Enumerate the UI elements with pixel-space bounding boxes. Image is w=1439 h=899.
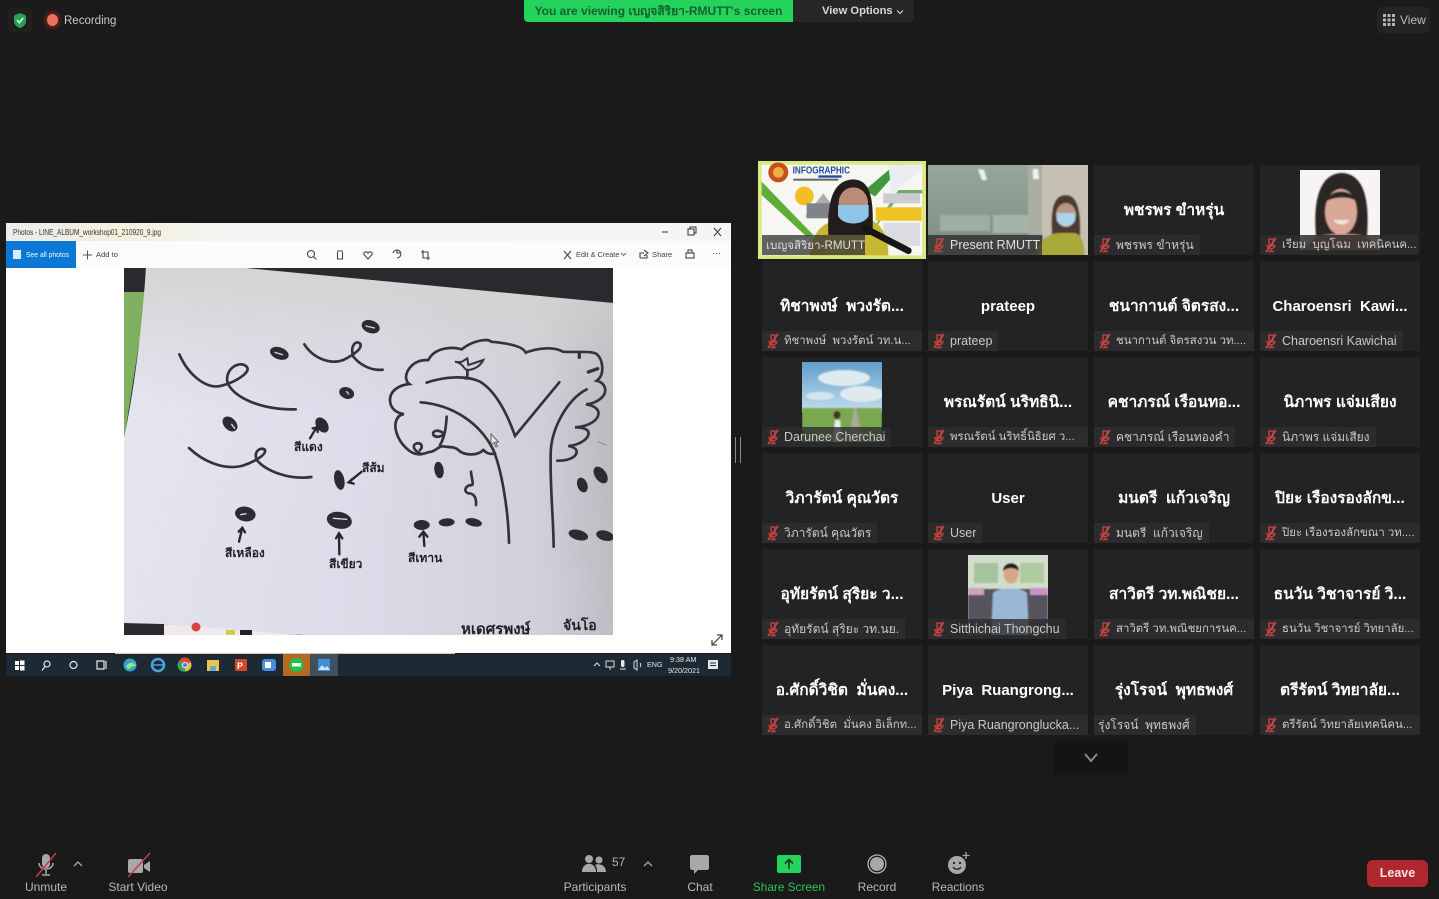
control: start video bbox=[108, 852, 168, 894]
name label bbox=[1260, 331, 1403, 351]
panel: active speaker tile เบญจสิริยา-RMUTT bbox=[758, 161, 926, 259]
icon: muted mic bbox=[767, 622, 779, 636]
tile Darunee Cherchai bbox=[762, 357, 922, 447]
tile รุ่งโรจน์ พุทธพงศ์ bbox=[1094, 645, 1254, 735]
control: start video: Start Video bbox=[108, 880, 168, 894]
title bar: Photos - LINE_ALBUM_workshop01_210920_9.jpg bbox=[13, 228, 161, 237]
recording indicator: Recording bbox=[64, 15, 116, 27]
name label: สาวิตรี วท.พณิชยการนค... bbox=[1116, 623, 1246, 635]
display name: อุทัยรัตน์ สุริยะ ว... bbox=[780, 586, 904, 603]
photo: hand drawing on paper: สีเหลือง bbox=[225, 546, 265, 560]
toolbar: Add to bbox=[96, 250, 118, 259]
title bar bbox=[6, 223, 731, 241]
avatar photo bbox=[802, 362, 882, 442]
name label bbox=[762, 331, 922, 351]
display name: สาวิตรี วท.พณิชย... bbox=[1109, 586, 1239, 603]
icon: muted mic bbox=[933, 622, 945, 636]
tile มนตรี แก้วเจริญ bbox=[1094, 453, 1254, 543]
panel: shared photo window bbox=[6, 223, 731, 676]
tile นิภาพร แจ่มเสียง bbox=[1260, 357, 1420, 447]
icon: muted mic bbox=[933, 718, 945, 732]
display name: ตรีรัตน์ วิทยาลัย... bbox=[1280, 682, 1400, 699]
name label: prateep bbox=[950, 334, 992, 348]
photo: hand drawing on paper: สีเทาน bbox=[408, 551, 443, 565]
name label: วิภารัตน์ คุณวัตร bbox=[784, 526, 871, 540]
name label: Present RMUTT bbox=[950, 238, 1040, 252]
name label bbox=[762, 235, 865, 255]
name label bbox=[928, 235, 1042, 255]
control: record bbox=[858, 854, 896, 894]
display name: มนตรี แก้วเจริญ bbox=[1118, 490, 1230, 507]
name label: เรียม บุญโฉม เทคนิคนค... bbox=[1282, 239, 1417, 251]
caret: participant options bbox=[644, 861, 652, 866]
control: reactions: Reactions bbox=[932, 880, 984, 894]
tile Sitthichai Thongchu bbox=[928, 549, 1088, 639]
name label: พชรพร ขำหรุ่น bbox=[1116, 238, 1194, 252]
display name: ทิชาพงษ์ พวงรัต... bbox=[780, 298, 904, 315]
toolbar: Edit & Create bbox=[576, 250, 619, 259]
photo: hand drawing on paper: จันโอ bbox=[563, 616, 597, 633]
toolbar: ··· bbox=[712, 248, 721, 258]
name label: ธนวัน วิชาจารย์ วิทยาลัย... bbox=[1282, 623, 1414, 635]
name label bbox=[1260, 235, 1418, 255]
icon: security shield bbox=[8, 8, 32, 32]
button: view options: View Options bbox=[822, 5, 893, 17]
name label: รุ่งโรจน์ พุทธพงศ์ bbox=[1098, 718, 1190, 732]
window strip under photo bbox=[115, 653, 455, 654]
display name: User bbox=[991, 490, 1025, 507]
name label bbox=[928, 619, 1066, 639]
name label bbox=[762, 619, 905, 639]
tile ชนากานต์ จิตรสงวน bbox=[1094, 261, 1254, 351]
icon: muted mic bbox=[1265, 334, 1277, 348]
name label bbox=[1094, 331, 1254, 351]
control: participants: Participants bbox=[564, 880, 626, 894]
icon: muted mic bbox=[767, 718, 779, 732]
tile คชาภรณ์ เรือนทองคำ bbox=[1094, 357, 1254, 447]
tile สาวิตรี วท.พณิชย bbox=[1094, 549, 1254, 639]
control: reactions bbox=[932, 852, 984, 894]
tile พรณรัตน์ นริทธินิ bbox=[928, 357, 1088, 447]
name label: User bbox=[950, 526, 976, 540]
name label: ปิยะ เรืองรองลักขณา วท.... bbox=[1282, 527, 1414, 539]
tile เรียม บุญโฉม bbox=[1260, 165, 1420, 255]
name label bbox=[928, 427, 1088, 447]
taskbar: ENG bbox=[647, 660, 663, 669]
tile User bbox=[928, 453, 1088, 543]
taskbar bbox=[6, 654, 731, 676]
name label: Sitthichai Thongchu bbox=[950, 622, 1060, 636]
icon: muted mic bbox=[1099, 334, 1111, 348]
name label bbox=[762, 715, 922, 735]
toolbar: See all photos bbox=[26, 250, 69, 259]
icon: muted mic bbox=[933, 430, 945, 444]
button: view layout: View bbox=[1400, 13, 1426, 27]
icon: muted mic bbox=[1099, 238, 1111, 252]
display name: คชาภรณ์ เรือนทอ... bbox=[1108, 394, 1240, 411]
button: next page chevron bbox=[1054, 741, 1128, 775]
name label: มนตรี แก้วเจริญ bbox=[1116, 526, 1203, 540]
panel: tile Present RMUTT bbox=[928, 165, 1088, 255]
tile พชรพร ขำหรุ่น bbox=[1094, 165, 1254, 255]
name label: พรณรัตน์ นริทธิ์นิธิยศ ว... bbox=[950, 431, 1075, 443]
icon: expand bbox=[712, 635, 722, 645]
taskbar: 9/20/2021 bbox=[668, 666, 700, 675]
name label bbox=[1094, 619, 1254, 639]
display name: รุ่งโรจน์ พุทธพงศ์ bbox=[1115, 682, 1233, 699]
tile prateep bbox=[928, 261, 1088, 351]
button: view layout bbox=[1377, 7, 1430, 33]
name label bbox=[1094, 427, 1235, 447]
splitter handle bbox=[735, 437, 741, 463]
display name: อ.ศักดิ์วิชิต มั่นคง... bbox=[776, 682, 908, 699]
mouse cursor bbox=[491, 434, 498, 447]
display name: นิภาพร แจ่มเสียง bbox=[1283, 394, 1397, 411]
name label: Darunee Cherchai bbox=[784, 430, 885, 444]
toolbar bbox=[6, 241, 731, 268]
white photo background bbox=[6, 268, 731, 653]
taskbar: 9:38 AM bbox=[670, 655, 696, 664]
icon: muted mic bbox=[1265, 430, 1277, 444]
photo: hand drawing on paper: สีเขียว bbox=[329, 557, 363, 571]
display name: พชรพร ขำหรุ่น bbox=[1124, 202, 1224, 219]
toolbar: Share bbox=[652, 250, 672, 259]
avatar photo bbox=[1300, 170, 1380, 250]
panel: active speaker tile เบญจสิริยา-RMUTT: INFOGRAPHIC bbox=[793, 166, 850, 177]
icon: muted mic bbox=[1099, 430, 1111, 444]
photo: hand drawing on paper: หเดศรพงษ์ bbox=[461, 620, 531, 638]
icon: muted mic bbox=[767, 334, 779, 348]
name label bbox=[928, 331, 998, 351]
icon: muted mic bbox=[933, 526, 945, 540]
photo: hand drawing on paper bbox=[124, 268, 615, 638]
taskbar: P bbox=[237, 661, 243, 671]
display name: ชนากานต์ จิตรสง... bbox=[1109, 298, 1239, 315]
photo: hand drawing on paper: สีแดง bbox=[294, 440, 323, 454]
tile ปิยะ เรืองรองลักษณา bbox=[1260, 453, 1420, 543]
tile Charoensri Kawichai bbox=[1260, 261, 1420, 351]
name label: คชาภรณ์ เรือนทองคำ bbox=[1116, 430, 1229, 444]
control: chat bbox=[687, 855, 713, 894]
tile ตรีรัตน์ วิทยาลัยเทคนิค bbox=[1260, 645, 1420, 735]
display name: prateep bbox=[981, 298, 1035, 315]
tile อุทัยรัตน์ สุริยะ bbox=[762, 549, 922, 639]
icon: muted mic bbox=[1099, 526, 1111, 540]
display name: Piya Ruangrong... bbox=[942, 682, 1074, 699]
display name: วิภารัตน์ คุณวัตร bbox=[786, 490, 898, 507]
icon: muted mic bbox=[933, 238, 945, 252]
caret: audio options bbox=[74, 861, 82, 866]
name label bbox=[1260, 523, 1420, 543]
name label: เบญจสิริยา-RMUTT bbox=[766, 239, 865, 252]
control: chat: Chat bbox=[687, 880, 713, 894]
control: share screen bbox=[753, 855, 825, 894]
tile Piya Ruangronglucka bbox=[928, 645, 1088, 735]
name label bbox=[762, 523, 877, 543]
photo: hand drawing on paper: สีส้ม bbox=[362, 461, 385, 475]
recording indicator bbox=[42, 10, 116, 30]
name label: ชนากานต์ จิตรสงวน วท.... bbox=[1116, 335, 1246, 347]
left swirls, leaves and colour labels bbox=[179, 318, 383, 554]
display name: Charoensri Kawi... bbox=[1272, 298, 1408, 315]
display name: ปิยะ เรืองรองลักข... bbox=[1275, 490, 1405, 507]
name label bbox=[1094, 523, 1209, 543]
name label: อ.ศักดิ์วิชิต มั่นคง อิเล็กท... bbox=[784, 719, 917, 731]
display name: พรณรัตน์ นริทธินิ... bbox=[944, 394, 1072, 411]
banner: viewing screen bbox=[524, 0, 793, 22]
name label: ตรีรัตน์ วิทยาลัยเทคนิคน... bbox=[1282, 719, 1412, 731]
tile อ.ศักดิ์วิชิต มั่นคง bbox=[762, 645, 922, 735]
tile ธนวัน วิชาจารย์ bbox=[1260, 549, 1420, 639]
icon: muted mic bbox=[1265, 238, 1277, 252]
tree drawing bbox=[390, 340, 615, 547]
button: view options bbox=[793, 0, 914, 22]
control: unmute: Unmute bbox=[25, 880, 67, 894]
name label: Piya Ruangronglucka... bbox=[950, 718, 1079, 732]
banner: viewing screen: You are viewing เบญจสิริยา-RMUTT's screen bbox=[535, 4, 782, 18]
icon: muted mic bbox=[767, 526, 779, 540]
name label bbox=[1094, 715, 1196, 735]
icon: muted mic bbox=[933, 334, 945, 348]
name label bbox=[928, 523, 982, 543]
name label bbox=[1094, 235, 1200, 255]
control: unmute bbox=[25, 852, 67, 894]
control: participants bbox=[564, 855, 626, 894]
icon: muted mic bbox=[767, 430, 779, 444]
name label: ทิชาพงษ์ พวงรัตน์ วท.น... bbox=[784, 335, 911, 347]
avatar photo bbox=[968, 555, 1048, 635]
control: share screen: Share Screen bbox=[753, 880, 825, 894]
name label: นิภาพร แจ่มเสียง bbox=[1282, 430, 1370, 444]
name label: อุทัยรัตน์ สุริยะ วท.นย. bbox=[784, 622, 899, 636]
name label bbox=[1260, 715, 1420, 735]
icon: muted mic bbox=[1265, 526, 1277, 540]
icon: muted mic bbox=[1265, 622, 1277, 636]
button: leave: Leave bbox=[1380, 866, 1415, 880]
control: record: Record bbox=[858, 880, 896, 894]
name label: Charoensri Kawichai bbox=[1282, 334, 1397, 348]
icon: muted mic bbox=[1099, 622, 1111, 636]
icon: muted mic bbox=[1265, 718, 1277, 732]
display name: ธนวัน วิชาจารย์ วิ... bbox=[1274, 586, 1406, 603]
tile วิภารัตน์ คุณวัตร bbox=[762, 453, 922, 543]
tile ทิชาพงษ์ พวงรัตน์ bbox=[762, 261, 922, 351]
button: leave bbox=[1367, 860, 1428, 887]
control: participants: 57 bbox=[612, 855, 625, 869]
name label bbox=[1260, 427, 1376, 447]
name label bbox=[1260, 619, 1420, 639]
name label bbox=[762, 427, 891, 447]
name label bbox=[928, 715, 1088, 735]
